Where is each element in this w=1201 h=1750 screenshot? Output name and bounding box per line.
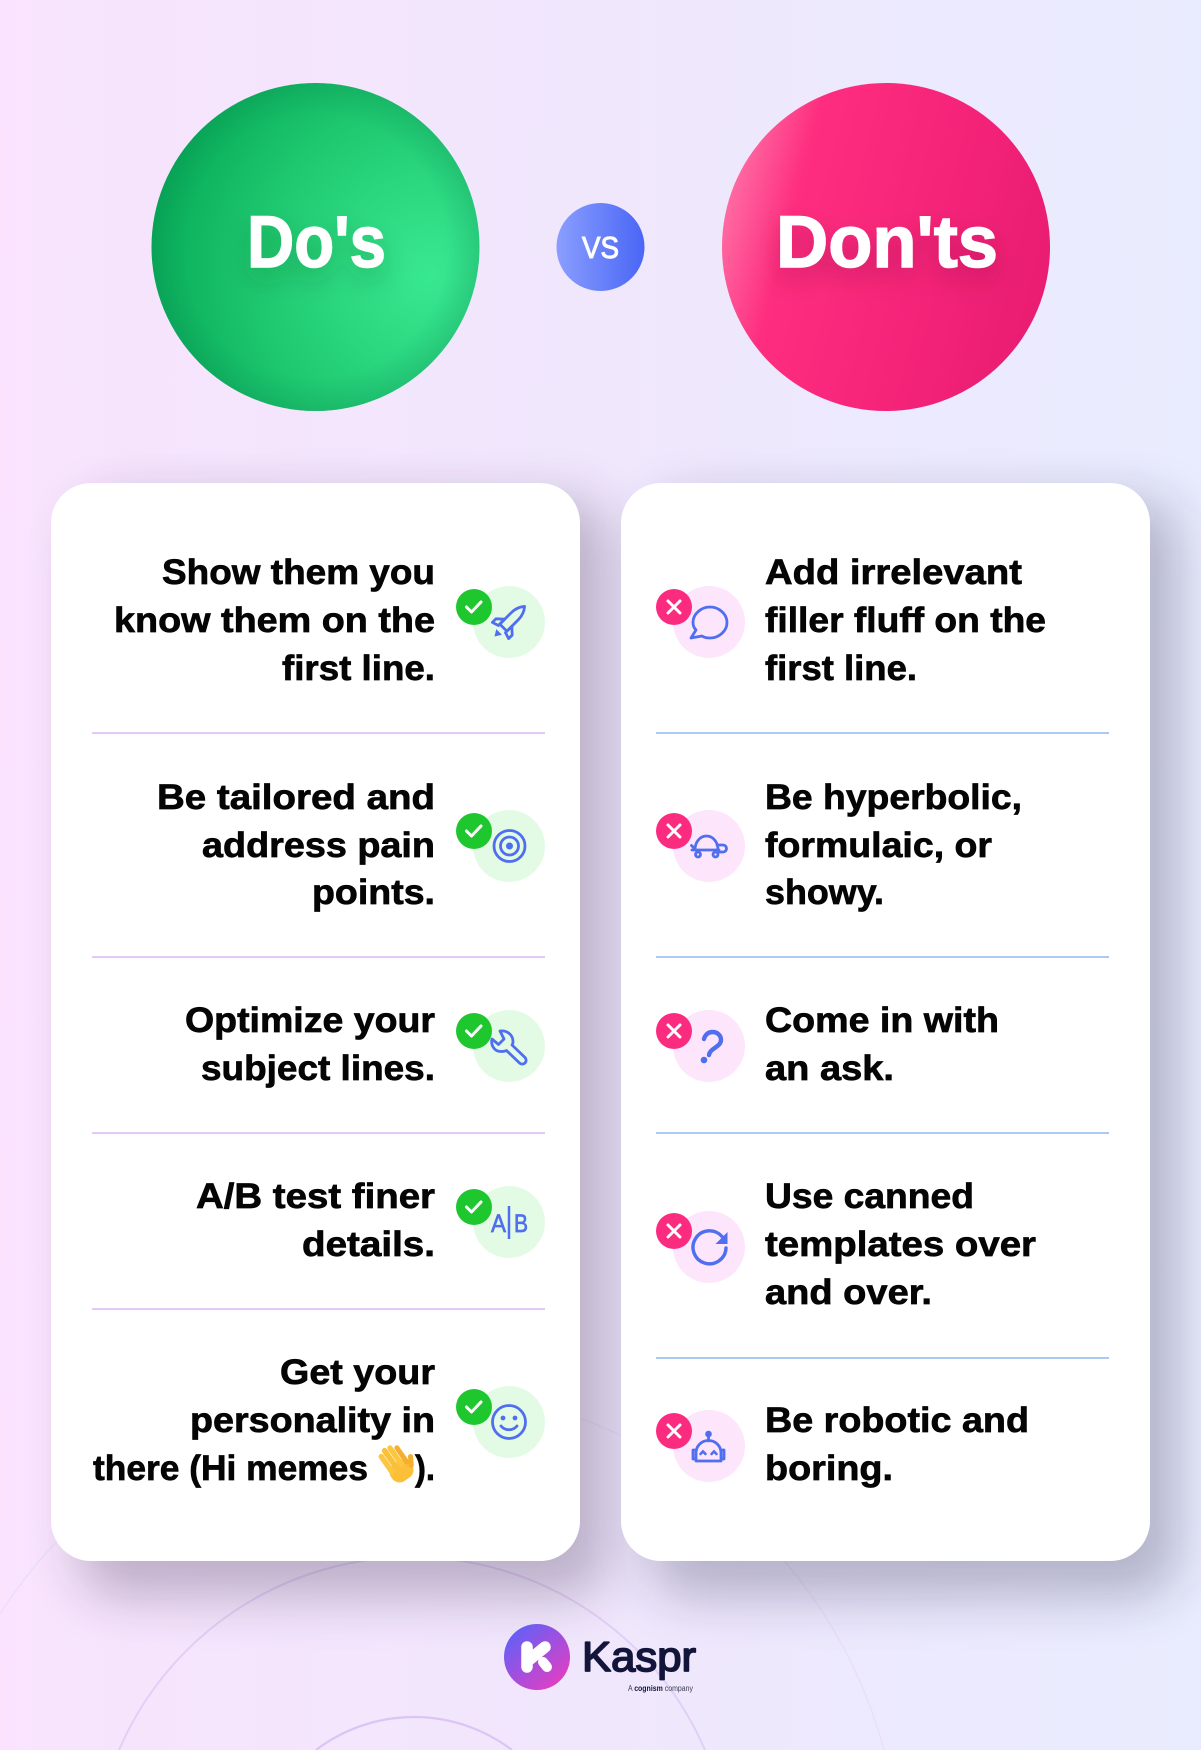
icon: A|B: A <box>491 1210 506 1238</box>
heading: Do's circle <box>152 83 480 411</box>
text: a/b test: A/B test finer <box>196 1176 435 1216</box>
text: be hyperbolic: Be hyperbolic, <box>765 777 1022 817</box>
text: be hyperbolic <box>765 777 1022 912</box>
text: optimize subject lines: subject lines. <box>201 1048 435 1088</box>
text: use canned templates <box>765 1176 1036 1312</box>
text: optimize subject lines: Optimize your <box>185 1000 435 1040</box>
text: come in with an ask: Come in with <box>765 1000 999 1040</box>
text: a/b test <box>196 1176 435 1264</box>
logo: Kaspr <box>504 1624 696 1693</box>
heading: Don'ts circle <box>722 83 1050 411</box>
text: be robotic <box>765 1400 1029 1488</box>
icon: target <box>456 810 545 882</box>
text: get your personality: ). <box>415 1448 435 1488</box>
badge: VS <box>556 203 644 291</box>
text: be robotic: boring. <box>765 1448 893 1488</box>
text: be tailored <box>157 777 435 912</box>
icon: wrench <box>456 1010 545 1082</box>
text: get your personality <box>93 1352 435 1488</box>
text: come in with an ask: an ask. <box>765 1048 894 1088</box>
icon: question mark <box>656 1010 745 1082</box>
text: show them you know them: Show them you <box>162 552 435 592</box>
text: use canned templates: and over. <box>765 1272 932 1312</box>
text: get your personality: personality in <box>190 1400 435 1440</box>
text: use canned templates: templates over <box>765 1224 1036 1264</box>
icon: K mark <box>504 1624 570 1690</box>
logo: Kaspr: A cognism company <box>628 1684 693 1693</box>
text: be hyperbolic: formulaic, or <box>765 825 992 865</box>
text: optimize subject lines <box>185 1000 435 1088</box>
text: get your personality: Get your <box>280 1352 435 1392</box>
text: add irrelevant filler <box>765 552 1046 688</box>
heading: Do's circle: Do's <box>247 202 386 283</box>
text: come in with an ask <box>765 1000 999 1088</box>
text: use canned templates: Use canned <box>765 1176 974 1216</box>
heading: Don'ts circle: Don'ts <box>776 202 998 283</box>
icon: turtle <box>656 810 745 882</box>
panel: don'ts <box>621 483 1150 1561</box>
text: be robotic: Be robotic and <box>765 1400 1029 1440</box>
icon: A|B: B <box>514 1210 528 1238</box>
logo: Kaspr: Kaspr <box>582 1633 696 1680</box>
text: add irrelevant filler: first line. <box>765 648 917 688</box>
icon: waving hand <box>375 1436 423 1486</box>
text: be tailored: address pain <box>202 825 435 865</box>
text: show them you know them <box>114 552 435 688</box>
text: be hyperbolic: showy. <box>765 872 884 912</box>
text: show them you know them: first line. <box>282 648 435 688</box>
text: add irrelevant filler: filler fluff on the <box>765 600 1046 640</box>
icon: robot <box>656 1410 745 1482</box>
icon: rocket <box>456 586 545 658</box>
icon: A|B <box>456 1186 545 1258</box>
badge: VS: VS <box>582 230 619 265</box>
panel: do's <box>51 483 580 1561</box>
icon: refresh arrow <box>656 1211 745 1283</box>
icon: speech bubble <box>656 586 745 658</box>
text: add irrelevant filler: Add irrelevant <box>765 552 1022 592</box>
icon: smile <box>456 1386 545 1458</box>
text: a/b test: details. <box>302 1224 435 1264</box>
text: be tailored: Be tailored and <box>157 777 435 817</box>
text: show them you know them: know them on the <box>114 600 435 640</box>
text: get your personality: there (Hi memes <box>93 1448 368 1488</box>
text: be tailored: points. <box>312 872 435 912</box>
